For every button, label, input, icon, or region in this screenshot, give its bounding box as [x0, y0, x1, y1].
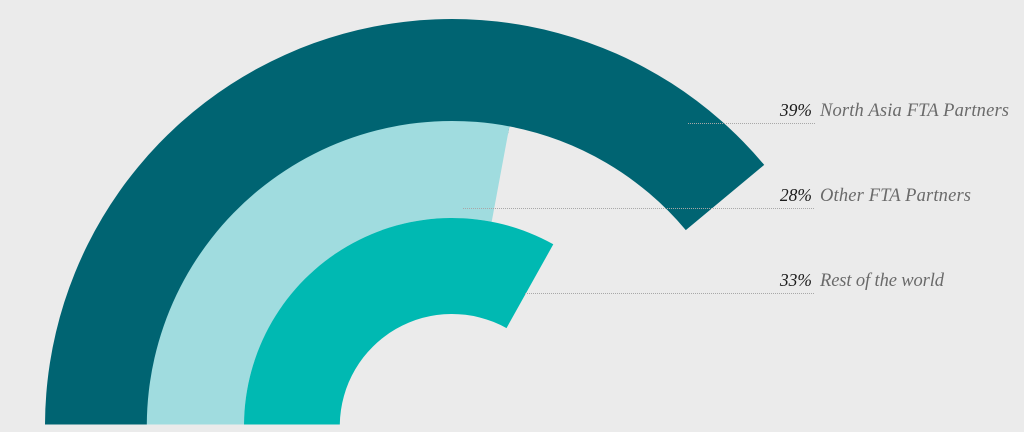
- chart: concentric arcs: [45, 19, 764, 424]
- label: Other FTA Partners: Other FTA Partners: [820, 186, 971, 206]
- label: Other FTA Partners: [463, 185, 971, 208]
- label: Rest of the world: 33%: [779, 270, 812, 290]
- label: North Asia FTA Partners: 39%: [779, 100, 812, 120]
- arc: North Asia FTA Partners 39%: [45, 19, 764, 424]
- arc: Rest of the world 33%: [244, 218, 553, 424]
- label: North Asia FTA Partners: [688, 100, 1009, 124]
- label: North Asia FTA Partners: North Asia FTA Partners: [819, 101, 1009, 121]
- arc: Other FTA Partners 28%: [147, 121, 509, 424]
- label: Rest of the world: Rest of the world: [819, 271, 945, 291]
- label: Rest of the world: [525, 270, 945, 294]
- label: Other FTA Partners: 28%: [780, 185, 812, 205]
